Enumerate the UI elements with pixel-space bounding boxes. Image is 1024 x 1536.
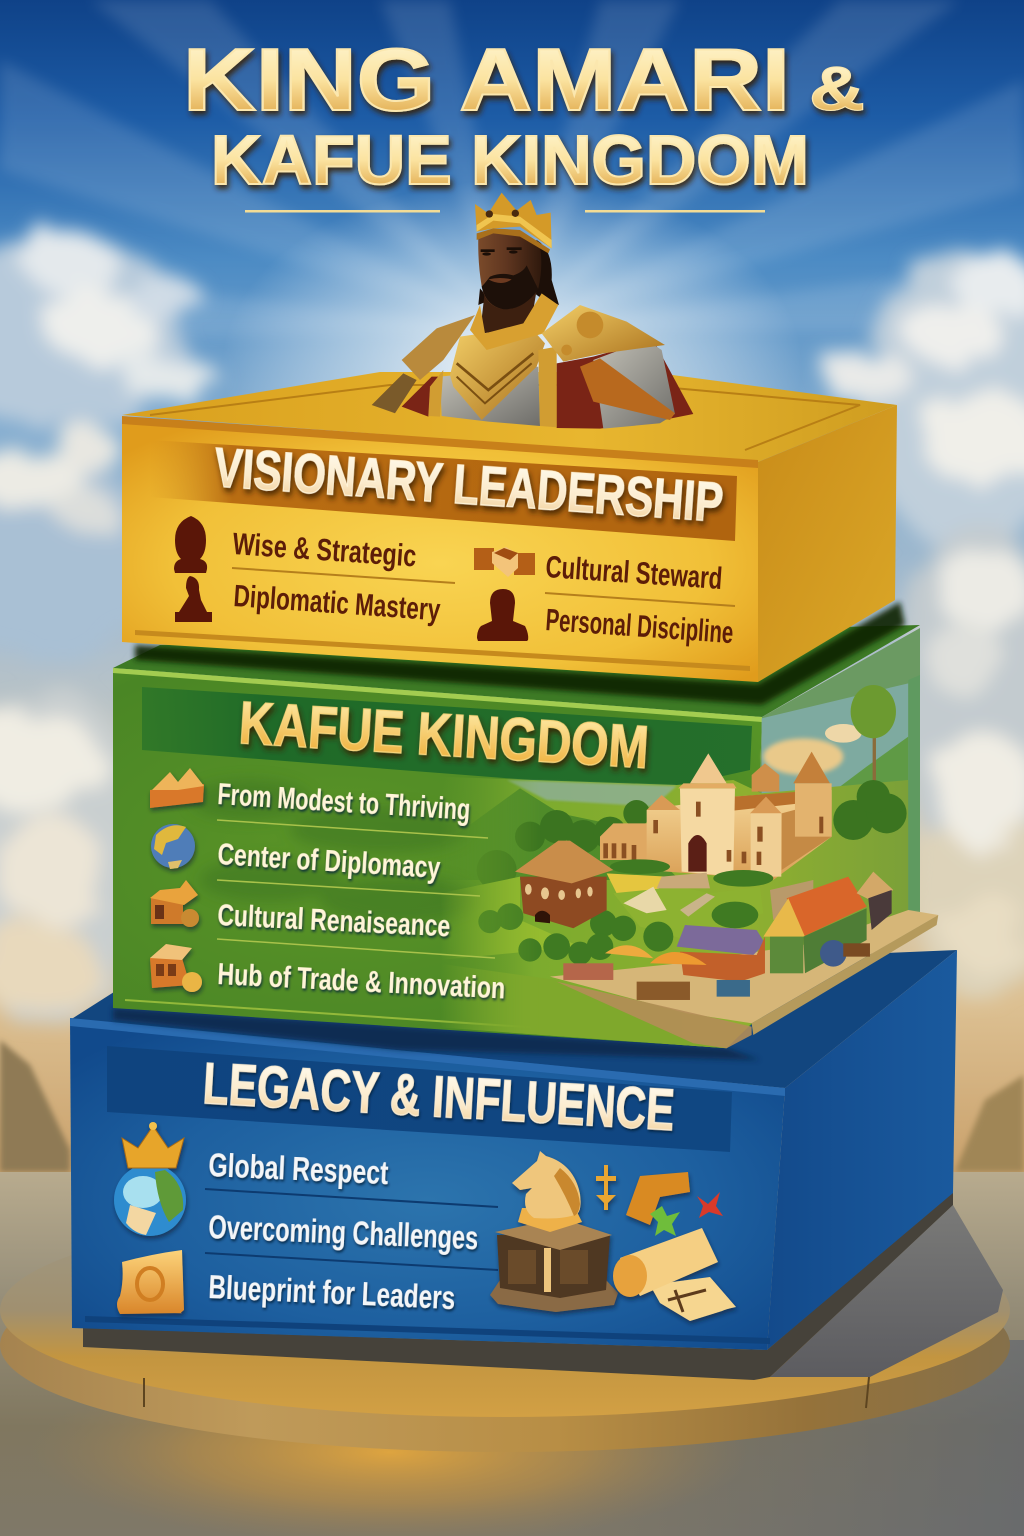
- item: diplomatic mastery: Diplomatic Mastery: [233, 578, 442, 627]
- platform top: [0, 1203, 1010, 1417]
- king: [372, 193, 693, 429]
- hair: [478, 240, 559, 305]
- icon: golden sword: [596, 1165, 616, 1210]
- gold vertical trim: [428, 370, 443, 417]
- scene sky: [762, 683, 908, 830]
- face: [478, 233, 541, 309]
- floor: [0, 1172, 1024, 1536]
- round hut: [515, 841, 613, 928]
- right cape: [557, 340, 693, 429]
- item: center of diplomacy: Center of Diplomacy: [217, 836, 442, 885]
- market stalls: [563, 872, 893, 1000]
- mottled hills behind text: [190, 780, 480, 924]
- slate shadow beside box: [770, 1205, 1003, 1377]
- icon: golden scroll tube: [626, 1172, 690, 1225]
- item: wise and strategic: Wise & Strategic: [232, 526, 417, 573]
- gold tier and king: [122, 193, 897, 682]
- blue side face: [767, 950, 957, 1350]
- blue front face: [70, 1018, 785, 1350]
- icon: green star: [650, 1206, 680, 1236]
- background sky: [0, 0, 1024, 1180]
- item: global respect: Global Respect: [208, 1146, 389, 1191]
- icon: chess knight on pedestal: [490, 1151, 618, 1312]
- platform rim: [0, 1238, 1010, 1452]
- icon: scroll blueprint: [613, 1228, 736, 1321]
- central glow: [222, 180, 802, 550]
- green front face: [113, 668, 762, 1048]
- sun rays: [0, 0, 1024, 340]
- crown: [475, 193, 552, 253]
- ampersand: &: [809, 55, 865, 124]
- gold front face: [122, 418, 758, 682]
- gold collar: [470, 293, 558, 350]
- icon: shop with coin: [150, 944, 202, 992]
- title: [183, 30, 865, 199]
- gold heading banner: [150, 440, 737, 541]
- neck: [480, 290, 537, 333]
- shrubs left: [478, 903, 542, 962]
- beard: [482, 265, 538, 309]
- scene tree: [851, 685, 896, 783]
- green tier shadow: [113, 1008, 760, 1060]
- gold box cast shadow: [135, 602, 905, 705]
- gold top face: [122, 372, 897, 462]
- silver arm: [593, 340, 675, 429]
- painted scene: [437, 675, 938, 1048]
- scene shrubs: [543, 859, 773, 965]
- item: blueprint for leaders: Blueprint for Leaders: [208, 1268, 456, 1316]
- forest clusters left: [480, 800, 649, 884]
- icon: globe: [151, 824, 195, 869]
- left shoulder: [402, 315, 475, 380]
- item: hub of trade and innovation: Hub of Trade & Innovation: [217, 956, 506, 1006]
- blue heading: LEGACY & INFLUENCE: [201, 1051, 676, 1143]
- slab ground: [550, 910, 938, 1023]
- distant mountains: [0, 1040, 1024, 1172]
- forest clusters right: [833, 780, 907, 840]
- gold heading: VISIONARY LEADERSHIP: [212, 435, 725, 534]
- silver breastplate: [440, 367, 540, 426]
- right shoulder: [542, 305, 665, 362]
- clouds right: [820, 250, 1024, 1000]
- blue top face: [70, 950, 957, 1088]
- icon: cart building: [150, 880, 199, 927]
- green right face: [752, 628, 920, 1024]
- left cape: [402, 377, 438, 417]
- clouds left: [0, 230, 215, 1030]
- icon: crown and globe: [114, 1122, 186, 1236]
- icon: house: [150, 768, 204, 808]
- panel: kafue kingdom: [113, 602, 938, 1048]
- icon: red star: [697, 1192, 723, 1218]
- item: from modest to thriving: From Modest to Thriving: [217, 776, 471, 827]
- icon: map scroll: [117, 1250, 184, 1314]
- panel: legacy and influence: [70, 950, 957, 1350]
- item: cultural steward: Cultural Steward: [545, 549, 723, 596]
- green heading banner: [142, 687, 752, 790]
- platform: [0, 1203, 1010, 1452]
- scene sky strip: [507, 780, 677, 807]
- scene ground: [437, 777, 908, 1048]
- icon: king bust: [477, 589, 528, 641]
- icon: helmet bust: [174, 516, 207, 573]
- item: personal discipline: Personal Discipline: [545, 602, 734, 650]
- title line two: KAFUE KINGDOM: [211, 121, 809, 199]
- icon: diplomat statue: [175, 576, 212, 622]
- green top face: [113, 625, 920, 717]
- item: cultural renaissance: Cultural Renaiseance: [217, 897, 451, 943]
- gold chevron: [450, 327, 545, 420]
- floor right cool tint: [540, 1340, 1024, 1536]
- item: overcoming challenges: Overcoming Challenges: [208, 1208, 479, 1256]
- floor reflection: [30, 1350, 750, 1536]
- icon: handshake: [474, 547, 535, 577]
- eyes: [481, 247, 522, 256]
- palace: [600, 752, 832, 920]
- green heading: KAFUE KINGDOM: [237, 689, 651, 781]
- faded left landscape: [437, 780, 727, 1048]
- blue heading banner: [107, 1046, 732, 1152]
- blue tier shadow base: [83, 1190, 953, 1380]
- title line one: KING AMARI: [183, 30, 790, 129]
- gold side face: [758, 405, 897, 682]
